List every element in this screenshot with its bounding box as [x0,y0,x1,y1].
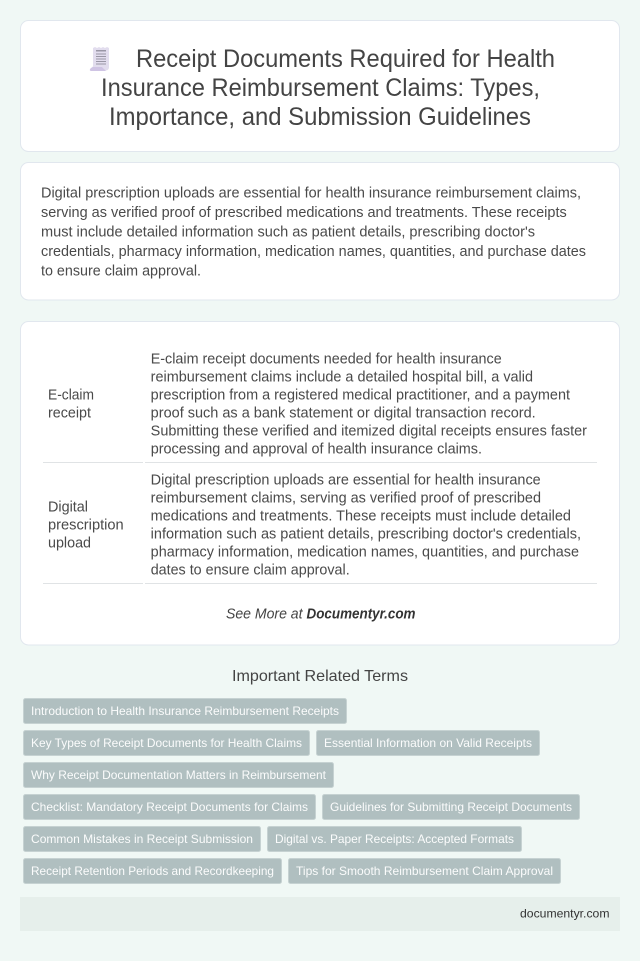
row: e-claim receipt [48,351,587,457]
row: e-claim receipt: E-claim receipt documents needed for health insurance [151,351,502,367]
tag: guidelines [322,794,580,820]
heading: important related terms: Important Related Terms [232,668,408,685]
row: digital prescription upload: Digital [48,500,88,516]
tag: retention periods [24,858,282,884]
tag: tips: Tips for Smooth Reimbursement Claim Approval [296,864,553,878]
panel: intro paragraph: to ensure claim approval. [41,264,201,280]
tag: guidelines: Guidelines for Submitting Receipt Documents [330,800,572,814]
title text: Insurance Reimbursement Claims: Types, [101,74,540,102]
tag: key types [24,730,310,756]
tag: checklist: Checklist: Mandatory Receipt Documents for Claims [31,800,308,814]
row: digital prescription upload: Digital prescription uploads are essential for health insurance [151,472,541,488]
tag: tips [288,858,560,884]
see more link [226,607,416,623]
tag: why documentation matters [24,762,334,788]
row: e-claim receipt: prescription from a registered medical practitioner, and a payment [151,387,570,403]
row: e-claim receipt: receipt [48,405,91,421]
tag: digital vs paper [268,826,522,852]
tag: essential information [316,730,540,756]
tag: essential information: Essential Information on Valid Receipts [324,736,532,750]
row: digital prescription upload: reimbursement claims, serving as verified proof of prescribed [151,490,541,506]
title text: Importance, and Submission Guidelines [109,103,531,131]
title text [101,45,555,131]
row: e-claim receipt: processing and approval of health insurance claims. [151,441,482,457]
tag: introduction: Introduction to Health Insurance Reimbursement Receipts [31,704,339,718]
panel: intro paragraph: serving as verified proof of prescribed medications and treatments. These receipts [41,205,567,221]
see more link: Documentyr.com [306,607,416,623]
panel: document table [20,322,620,645]
icon: receipt [90,47,109,71]
panel: intro paragraph: Digital prescription uploads are essential for health insurance reimbursement claims, [41,186,581,202]
row: e-claim receipt: E-claim [48,387,94,403]
tag: common mistakes [24,826,260,852]
tag: digital vs paper: Digital vs. Paper Receipts: Accepted Formats [275,832,514,846]
tag: key types: Key Types of Receipt Documents for Health Claims [31,736,302,750]
related term tags [24,698,580,884]
tag: checklist [24,794,316,820]
panel: intro paragraph: must include detailed information such as patient details, prescribing doctor's [41,224,535,240]
title text: Receipt Documents Required for Health [136,45,555,73]
row: e-claim receipt: reimbursement claims include a detailed hospital bill, a valid [151,369,533,385]
panel: title card [20,20,620,152]
footer bar: documentyr.com [520,907,610,921]
row: digital prescription upload: prescription [48,518,124,534]
panel: intro paragraph [20,162,620,300]
footer bar [20,897,620,931]
row: digital prescription upload: pharmacy information, medication names, quantities, and purchase [151,544,579,560]
row: digital prescription upload: information such as patient details, prescribing doctor's credentials, [151,526,581,542]
row: e-claim receipt: proof such as a bank statement or digital transaction record. [151,405,536,421]
row: digital prescription upload: upload [48,536,91,552]
row: digital prescription upload: dates to ensure claim approval. [151,562,350,578]
see more link: See More at [226,607,303,623]
tag: why documentation matters: Why Receipt Documentation Matters in Reimbursement [31,768,327,782]
row: e-claim receipt: Submitting these verified and itemized digital receipts ensures faster [151,423,587,439]
panel: intro paragraph: credentials, pharmacy information, medication names, quantities, and purchase dates [41,244,586,260]
tag: introduction [24,698,346,724]
tag: common mistakes: Common Mistakes in Receipt Submission [31,832,253,846]
row: digital prescription upload [48,472,581,578]
tag: retention periods: Receipt Retention Periods and Recordkeeping [31,864,274,878]
row: digital prescription upload: medications and treatments. These receipts must include detailed [151,508,571,524]
